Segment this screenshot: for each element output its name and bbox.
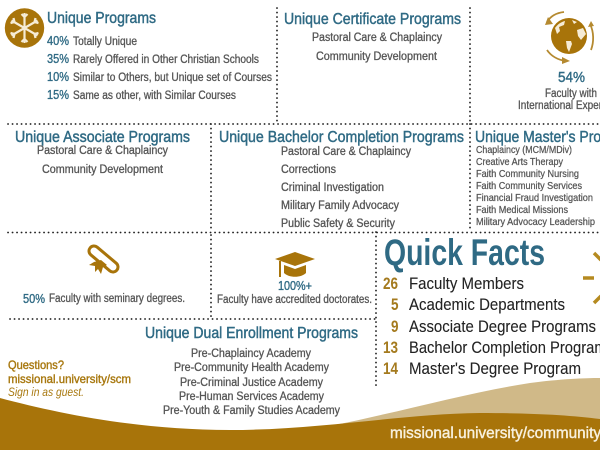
stat list: program uniqueness: 15% — [47, 87, 69, 102]
heading: dual enrollment programs: Unique Dual Enrollment Programs — [145, 325, 358, 342]
panel: unique master's programs: Faith Medical Missions — [476, 205, 568, 216]
panel: unique certificate programs: Pastoral Care & Chaplaincy — [312, 32, 442, 44]
panel: unique bachelor completion programs: Pastoral Care & Chaplaincy — [281, 146, 411, 158]
icon: sun rays — [583, 253, 600, 303]
questions contact: Sign in as guest. — [8, 385, 84, 399]
panel: quick facts — [383, 232, 600, 378]
icon: graduation cap — [275, 252, 315, 277]
fact list: Master's Degree Program — [409, 359, 581, 378]
icon: snowflake — [5, 8, 44, 48]
panel: unique certificate programs: Community Development — [316, 51, 438, 63]
panel: unique master's programs: Chaplaincy (MCM/MDiv) — [476, 145, 572, 156]
stat list: program uniqueness: Same as other, with Similar Courses — [73, 90, 236, 102]
panel: international experience: 54% — [558, 69, 585, 86]
fact list: 13 — [383, 338, 398, 357]
panel: unique dual enrollment programs: Pre-Community Health Academy — [174, 362, 329, 374]
panel: unique master's programs: Faith Community Services — [476, 181, 582, 192]
heading: certificate programs: Unique Certificate Programs — [284, 11, 461, 28]
panel: unique programs — [5, 8, 272, 102]
icon: diploma scroll — [89, 251, 113, 274]
panel: international experience — [518, 12, 600, 112]
panel: seminary degrees — [23, 251, 185, 306]
stat list: program uniqueness: Similar to Others, but Unique set of Courses — [73, 72, 272, 84]
panel: unique master's programs: Faith Community Nursing — [476, 169, 579, 180]
fact list: Academic Departments — [409, 295, 565, 314]
panel: unique dual enrollment programs: Pre-Criminal Justice Academy — [180, 377, 323, 389]
panel: accredited doctorates: 100%+ — [278, 278, 312, 293]
footer wave — [0, 378, 600, 450]
fact list: Faculty Members — [409, 274, 524, 293]
icon: globe with arrows — [545, 12, 594, 64]
stat list: program uniqueness — [47, 33, 272, 102]
panel: unique dual enrollment programs: Pre-Chaplaincy Academy — [191, 348, 311, 360]
panel: unique master's programs — [475, 129, 600, 228]
heading: associate programs: Unique Associate Programs — [15, 129, 190, 146]
stat list: program uniqueness: 40% — [47, 33, 69, 48]
panel: unique bachelor completion programs: Military Family Advocacy — [281, 200, 399, 212]
panel: unique dual enrollment programs: Pre-Human Services Academy — [179, 391, 324, 403]
panel: seminary degrees: Faculty with seminary degrees. — [49, 293, 185, 305]
panel: unique bachelor completion programs: Criminal Investigation — [281, 182, 384, 194]
panel: unique certificate programs — [284, 11, 461, 63]
panel: unique dual enrollment programs: Pre-Youth & Family Studies Academy — [163, 405, 340, 417]
stat list: program uniqueness: Totally Unique — [73, 36, 137, 48]
panel: unique associate programs: Community Development — [42, 164, 164, 176]
panel: unique dual enrollment programs — [145, 325, 358, 417]
stat list: program uniqueness: 10% — [47, 69, 69, 84]
heading: unique programs: Unique Programs — [47, 10, 156, 27]
fact list: 9 — [391, 317, 398, 336]
panel: accredited doctorates — [217, 252, 372, 306]
fact list — [383, 274, 600, 378]
stat list: program uniqueness: Rarely Offered in Other Christian Schools — [73, 54, 259, 66]
stat list: program uniqueness: 35% — [47, 51, 69, 66]
panel: unique master's programs: Creative Arts Therapy — [476, 157, 563, 168]
questions contact: Questions? — [8, 358, 64, 372]
fact list: 26 — [383, 274, 398, 293]
fact list: 14 — [383, 359, 398, 378]
panel: unique bachelor completion programs — [219, 129, 464, 230]
panel: accredited doctorates: Faculty have accredited doctorates. — [217, 294, 372, 306]
panel: unique associate programs — [15, 129, 190, 176]
panel: unique associate programs: Pastoral Care & Chaplaincy — [37, 145, 168, 157]
panel: seminary degrees: 50% — [23, 291, 45, 306]
heading: quick facts: Quick Facts — [384, 232, 545, 273]
heading: bachelor completion programs: Unique Bachelor Completion Programs — [219, 129, 464, 146]
fact list: 5 — [391, 295, 398, 314]
questions contact: missional.university/scm — [8, 372, 131, 386]
panel: unique bachelor completion programs: Corrections — [281, 164, 336, 176]
panel: unique bachelor completion programs: Public Safety & Security — [281, 218, 395, 230]
questions contact — [8, 358, 131, 399]
